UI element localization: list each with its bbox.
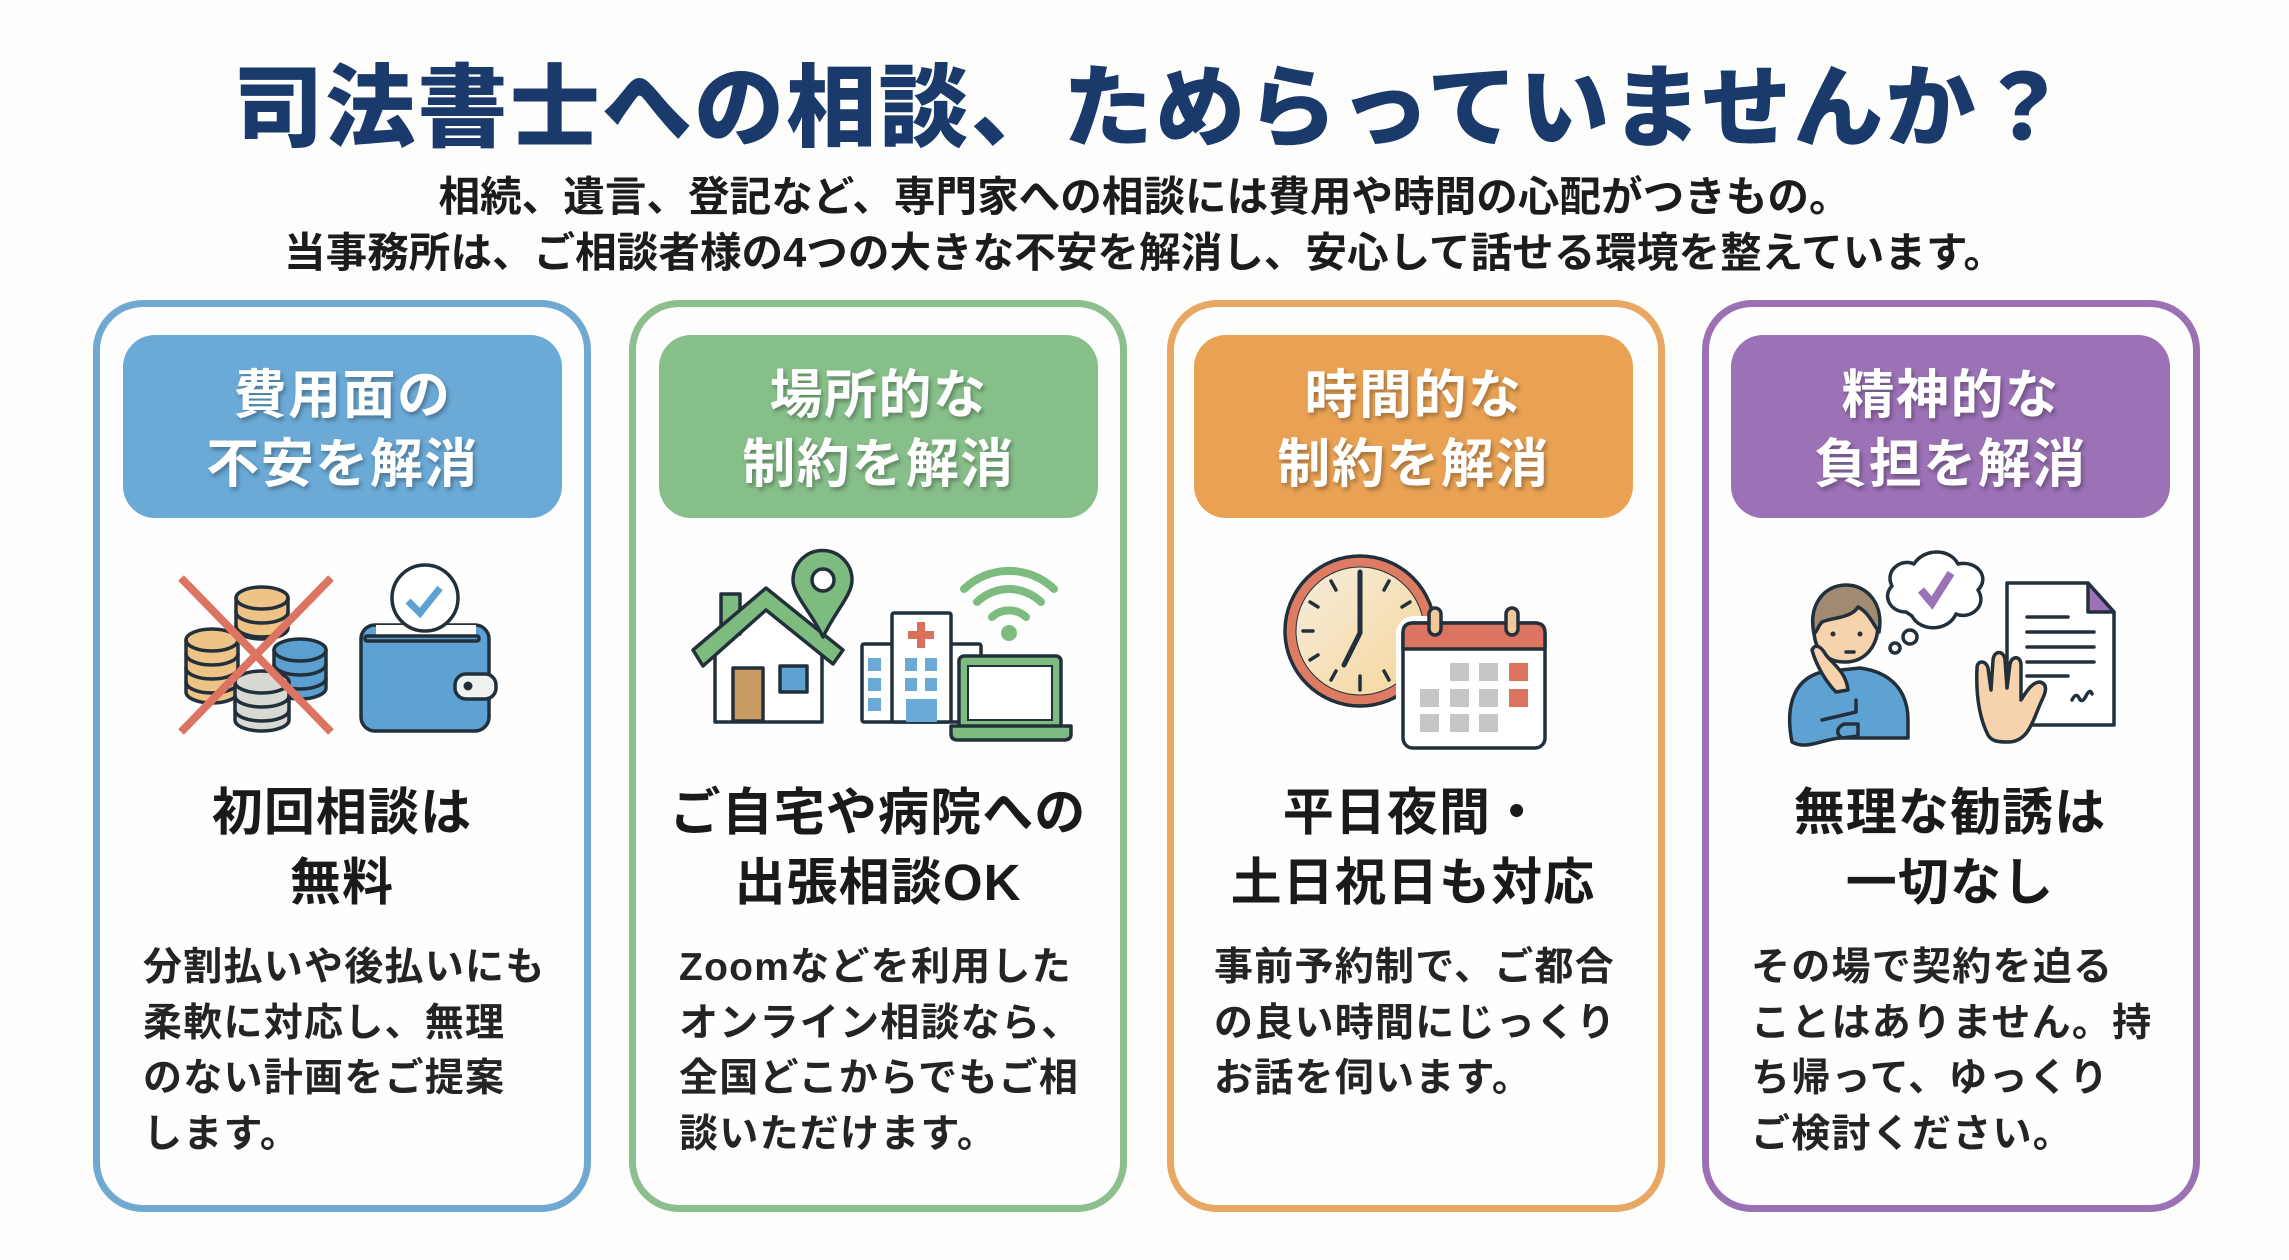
body: time: お話を伺います。 [1214,1057,1532,1100]
subheading: mental: 無理な勧誘は [1794,784,2106,841]
body: cost: 柔軟に対応し、無理 [143,1002,505,1044]
subheading: cost [212,784,472,911]
subheading: cost: 初回相談は [212,784,472,841]
header: location: 場所的な [770,366,988,425]
subheading: time [1231,784,1595,911]
body: location: 全国どこからでもご相 [679,1057,1079,1100]
header: time: 時間的な [1304,366,1522,425]
header: time [1194,335,1633,518]
subheading: cost: 無料 [290,854,394,911]
header: cost: 費用面の [234,366,452,425]
body: mental [1751,946,2152,1156]
body: mental: ご検討ください。 [1751,1112,2073,1156]
body: cost: のない計画をご提案 [143,1057,505,1100]
icon: person, thought bubble, hand, document [1788,550,2116,747]
body: time [1214,946,1617,1100]
header: time: 制約を解消 [1277,434,1550,494]
body: location [679,946,1082,1156]
icon: coins crossed out and wallet [178,563,498,735]
title: 司法書士への相談、ためらっていませんか？ [233,59,2070,159]
body: time: 事前予約制で、ご都合 [1214,946,1615,989]
body: mental: ことはありません。持 [1751,1002,2152,1044]
header: location: 制約を解消 [742,434,1015,494]
subheading: time: 平日夜間・ [1283,784,1543,841]
header: cost [123,335,562,518]
panel: cost [93,300,591,1212]
body: time: の良い時間にじっくり [1214,1002,1617,1044]
lead text: 相続、遺言、登記など、専門家への相談には費用や時間の心配がつきもの。 [438,173,1851,220]
header: mental [1731,335,2170,518]
body: cost: 分割払いや後払いにも [143,946,546,989]
body: cost: します。 [143,1112,300,1156]
body: location: Zoomなどを利用した [679,946,1072,989]
icon: clock and calendar [1283,554,1547,750]
lead text: 当事務所は、ご相談者様の4つの大きな不安を解消し、安心して話せる環境を整えています。 [284,229,2005,276]
header: cost: 不安を解消 [206,434,479,494]
panel: mental [1702,300,2200,1212]
panel: location [629,300,1127,1212]
body: mental: その場で契約を迫る [1751,946,2113,989]
body: location: オンライン相談なら、 [679,1002,1082,1044]
subheading: location: ご自宅や病院への [670,784,1086,841]
body: cost [143,946,546,1156]
header: mental: 負担を解消 [1814,434,2087,494]
header: mental: 精神的な [1842,366,2060,425]
subheading: mental: 一切なし [1846,854,2054,911]
subheading: location [670,784,1086,911]
lead text [284,173,2005,276]
header: location [659,335,1098,518]
icon: house, hospital, laptop, wifi [691,548,1073,742]
panel: time [1167,300,1665,1212]
subheading: location: 出張相談OK [734,854,1022,911]
subheading: mental [1794,784,2106,911]
body: mental: ち帰って、ゆっくり [1751,1057,2109,1100]
subheading: time: 土日祝日も対応 [1231,854,1595,911]
body: location: 談いただけます。 [679,1112,997,1156]
